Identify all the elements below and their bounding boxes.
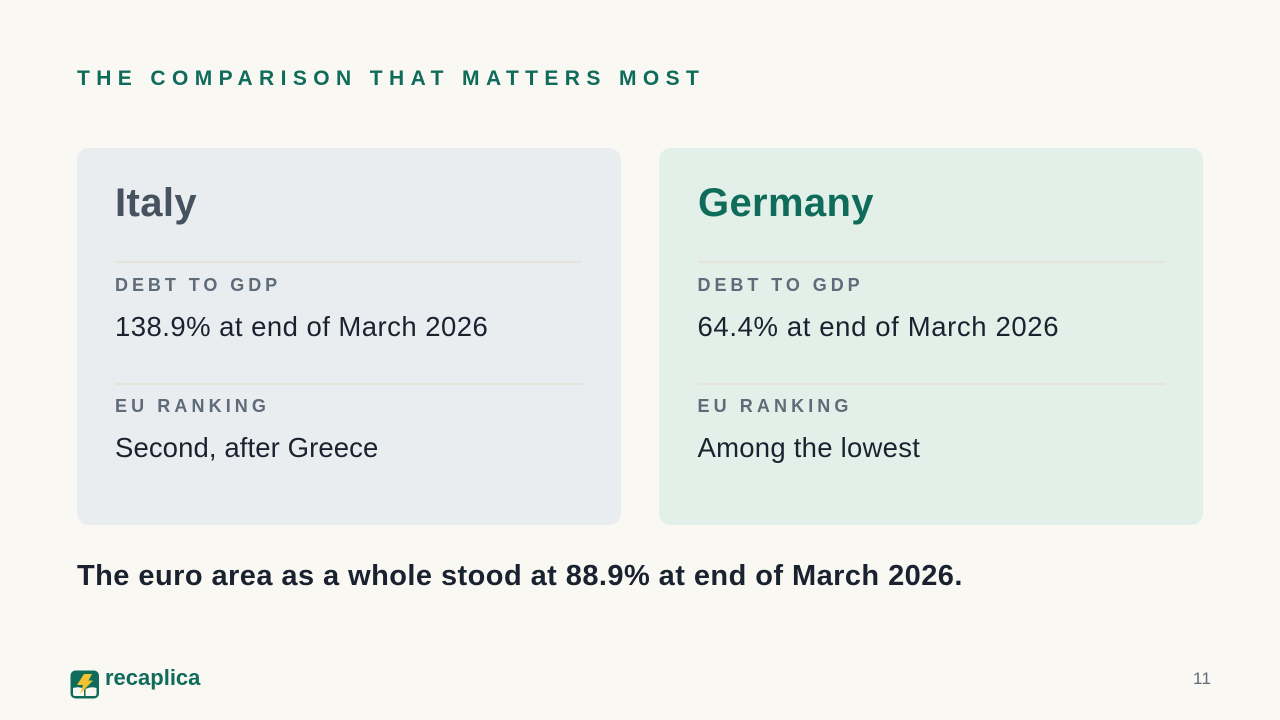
value: debt to GDP: 138.9% at end of March 2026 — [115, 311, 488, 342]
logo: recaplica — [70, 665, 200, 698]
value: debt to GDP: 64.4% at end of March 2026 — [698, 311, 1059, 342]
value: EU ranking: Second, after Greece — [115, 432, 378, 463]
page number: 11 — [1193, 669, 1211, 688]
heading: Germany: Germany — [698, 181, 874, 225]
wordmark: recaplica — [105, 665, 200, 690]
panel: Italy — [77, 148, 621, 525]
icon: lightning over open book — [70, 670, 99, 698]
value: EU ranking: Among the lowest — [698, 432, 920, 463]
label: EU ranking: EU RANKING — [698, 396, 853, 416]
label: debt to GDP: DEBT TO GDP — [698, 275, 864, 295]
panel: Germany — [659, 148, 1203, 525]
heading: Italy: Italy — [115, 181, 197, 225]
summary statement: The euro area as a whole stood at 88.9% at end of March 2026. — [77, 560, 963, 592]
title: THE COMPARISON THAT MATTERS MOST — [77, 67, 705, 90]
label: debt to GDP: DEBT TO GDP — [115, 275, 281, 295]
label: EU ranking: EU RANKING — [115, 396, 270, 416]
